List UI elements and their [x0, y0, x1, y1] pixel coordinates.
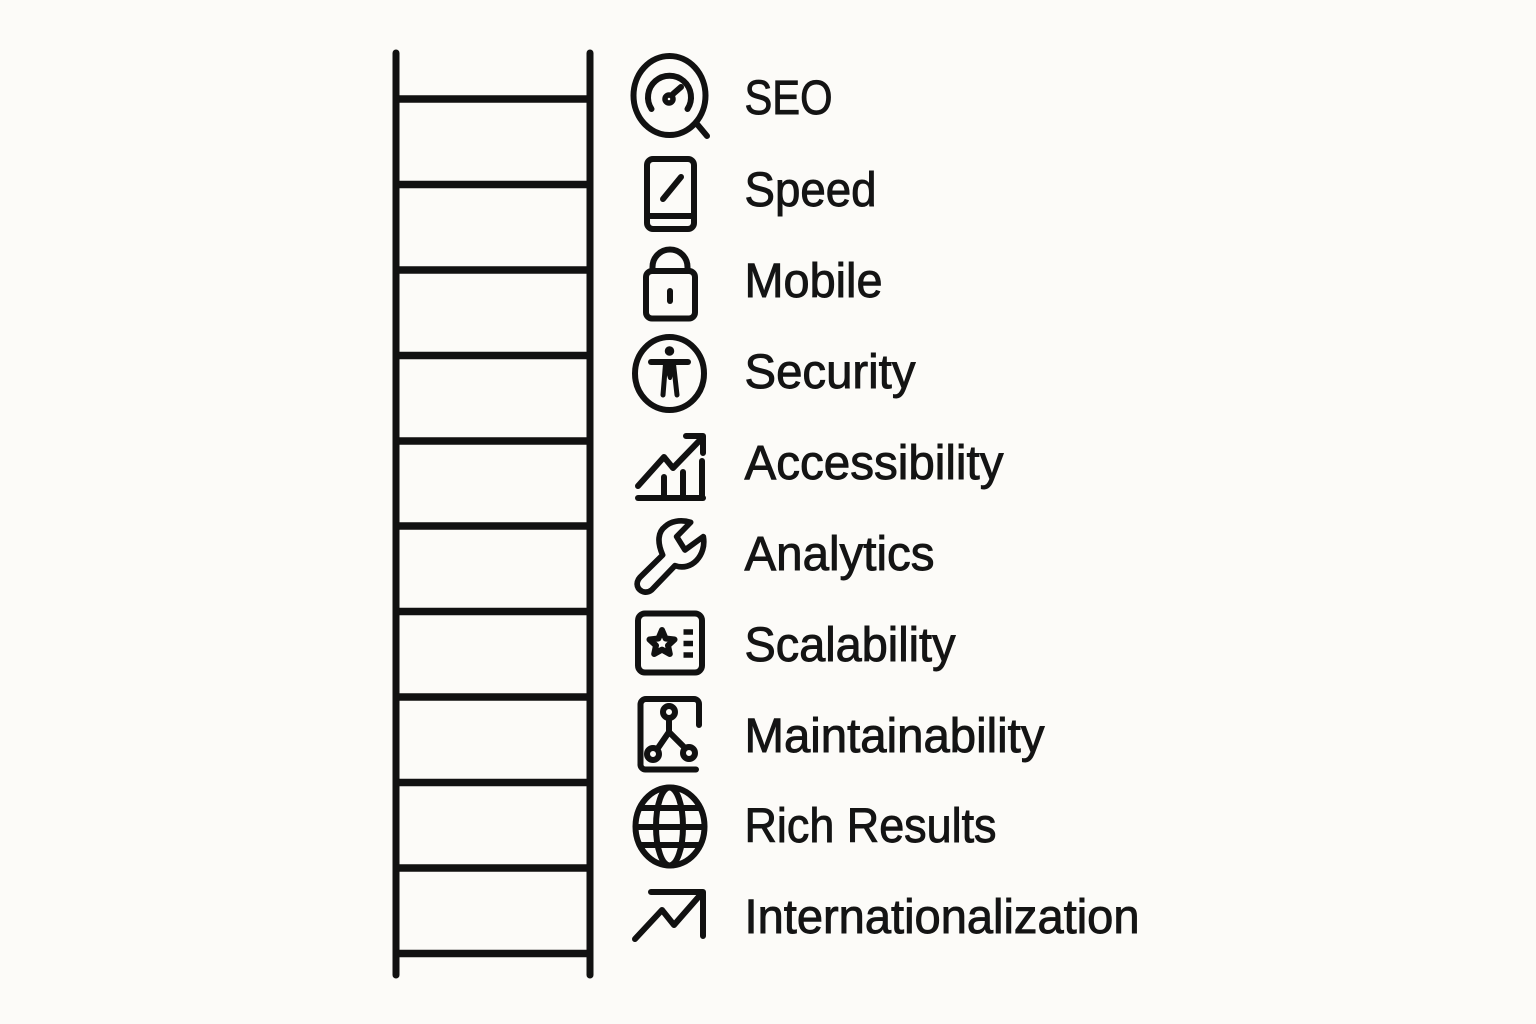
- label: Security: Security: [744, 346, 916, 399]
- label: Speed: Speed: [744, 164, 876, 217]
- icon: node tree: [640, 699, 699, 770]
- icon: padlock: [646, 250, 695, 318]
- icon: star card: [638, 614, 702, 672]
- icon: gauge magnifier: [634, 56, 707, 136]
- label: Analytics: Analytics: [744, 528, 934, 581]
- icon: growth chart: [638, 436, 703, 498]
- label: Scalability: Scalability: [744, 619, 956, 672]
- icon: globe: [636, 788, 704, 866]
- label: Maintainability: Maintainability: [744, 710, 1044, 763]
- label: SEO: SEO: [744, 72, 832, 125]
- label: Mobile: Mobile: [744, 255, 882, 308]
- right rail: [586, 53, 594, 975]
- ladder: [396, 53, 590, 975]
- label: Rich Results: Rich Results: [744, 800, 996, 853]
- rungs: [396, 99, 590, 954]
- icon: accessibility figure: [635, 337, 704, 410]
- icon: wrench: [637, 521, 704, 592]
- icon: phone book: [647, 159, 694, 229]
- label: Accessibility: Accessibility: [744, 437, 1004, 490]
- left rail: [392, 53, 400, 975]
- label: Internationalization: Internationalization: [744, 891, 1140, 944]
- icon: trend arrow: [635, 892, 703, 939]
